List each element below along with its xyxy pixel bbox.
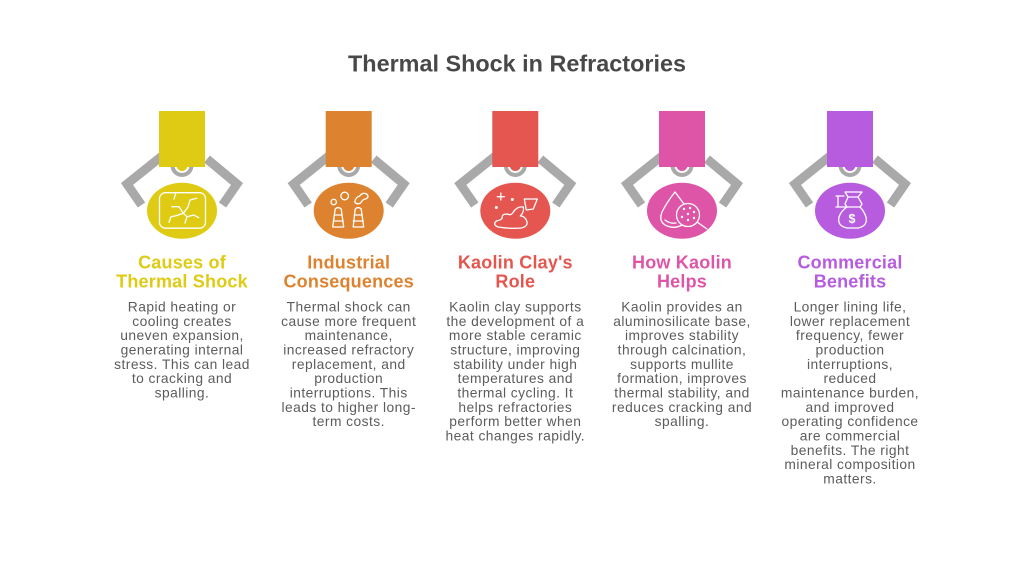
panel: commercial benefits xyxy=(781,111,919,486)
heading: Benefits xyxy=(814,272,886,292)
heading: How Kaolin xyxy=(632,252,732,272)
description: reduces cracking and xyxy=(612,400,752,415)
description: term costs. xyxy=(312,414,385,429)
icon: drop and magnifier xyxy=(647,183,717,239)
description: thermal stability, and xyxy=(614,385,750,400)
description: operating confidence xyxy=(781,414,919,429)
heading: Commercial xyxy=(797,252,903,272)
description: interruptions, xyxy=(807,357,893,372)
description: leads to higher long- xyxy=(281,400,416,415)
description: Rapid heating or xyxy=(128,300,236,314)
description: perform better when xyxy=(449,414,581,429)
claw graphic: consequences xyxy=(294,111,404,205)
description: improves stability xyxy=(625,328,739,343)
description: production xyxy=(816,342,884,357)
description: benefits. The right xyxy=(791,443,909,458)
description: aluminosilicate base, xyxy=(613,314,751,329)
claw graphic: causes xyxy=(127,111,237,205)
heading: Industrial xyxy=(307,252,390,272)
description: maintenance, xyxy=(305,328,393,343)
description: and improved xyxy=(806,400,894,415)
heading: Role xyxy=(495,272,535,292)
description: stress. This can lead xyxy=(114,357,250,372)
heading: Helps xyxy=(657,272,707,292)
icon: money bag: $ xyxy=(849,212,856,226)
description: production xyxy=(314,371,383,386)
claw graphic: helps xyxy=(627,111,737,205)
heading: Causes of xyxy=(138,252,226,272)
description: heat changes rapidly. xyxy=(446,428,585,443)
description: temperatures and xyxy=(458,371,573,386)
description: matters. xyxy=(823,471,877,486)
description: helps refractories xyxy=(458,400,572,415)
description: lower replacement xyxy=(790,314,910,329)
description: increased refractory xyxy=(283,342,414,357)
panel: kaolin clay's role xyxy=(446,111,585,443)
icon: clay mound xyxy=(480,183,550,239)
description: reduced xyxy=(823,371,877,386)
description: replacement, and xyxy=(292,357,406,372)
title: Thermal Shock in Refractories xyxy=(348,50,686,76)
description: spalling. xyxy=(155,385,209,400)
description: Kaolin provides an xyxy=(621,300,743,314)
description: through calcination, xyxy=(618,342,746,357)
heading: Thermal Shock xyxy=(116,272,249,292)
description: cooling creates xyxy=(132,314,232,329)
description: maintenance burden, xyxy=(781,385,919,400)
panel: causes of thermal shock xyxy=(114,111,250,400)
description: to cracking and xyxy=(132,371,232,386)
description: structure, improving xyxy=(450,342,580,357)
description: generating internal xyxy=(121,342,243,357)
description: stability under high xyxy=(453,357,577,372)
description: mineral composition xyxy=(784,457,916,472)
description: formation, improves xyxy=(617,371,747,386)
description: cause more frequent xyxy=(281,314,416,329)
description: frequency, fewer xyxy=(796,328,904,343)
description: spalling. xyxy=(655,414,709,429)
description: supports mullite xyxy=(630,357,734,372)
description: uneven expansion, xyxy=(120,328,244,343)
heading: Consequences xyxy=(283,272,414,292)
description: more stable ceramic xyxy=(449,328,582,343)
description: are commercial xyxy=(800,428,900,443)
claw graphic: role xyxy=(460,111,570,205)
description: the development of a xyxy=(446,314,584,329)
icon: smokestacks xyxy=(314,183,384,239)
description: interruptions. This xyxy=(290,385,408,400)
description: Kaolin clay supports xyxy=(449,300,582,314)
panel: how kaolin helps xyxy=(612,111,752,429)
claw graphic: benefits xyxy=(795,111,905,205)
panel: industrial consequences xyxy=(281,111,416,429)
icon: money bag xyxy=(815,183,885,239)
icon: cracked surface xyxy=(147,183,217,239)
description: Longer lining life, xyxy=(794,300,906,314)
description: Thermal shock can xyxy=(287,300,411,314)
description: thermal cycling. It xyxy=(457,385,573,400)
heading: Kaolin Clay's xyxy=(458,252,573,272)
